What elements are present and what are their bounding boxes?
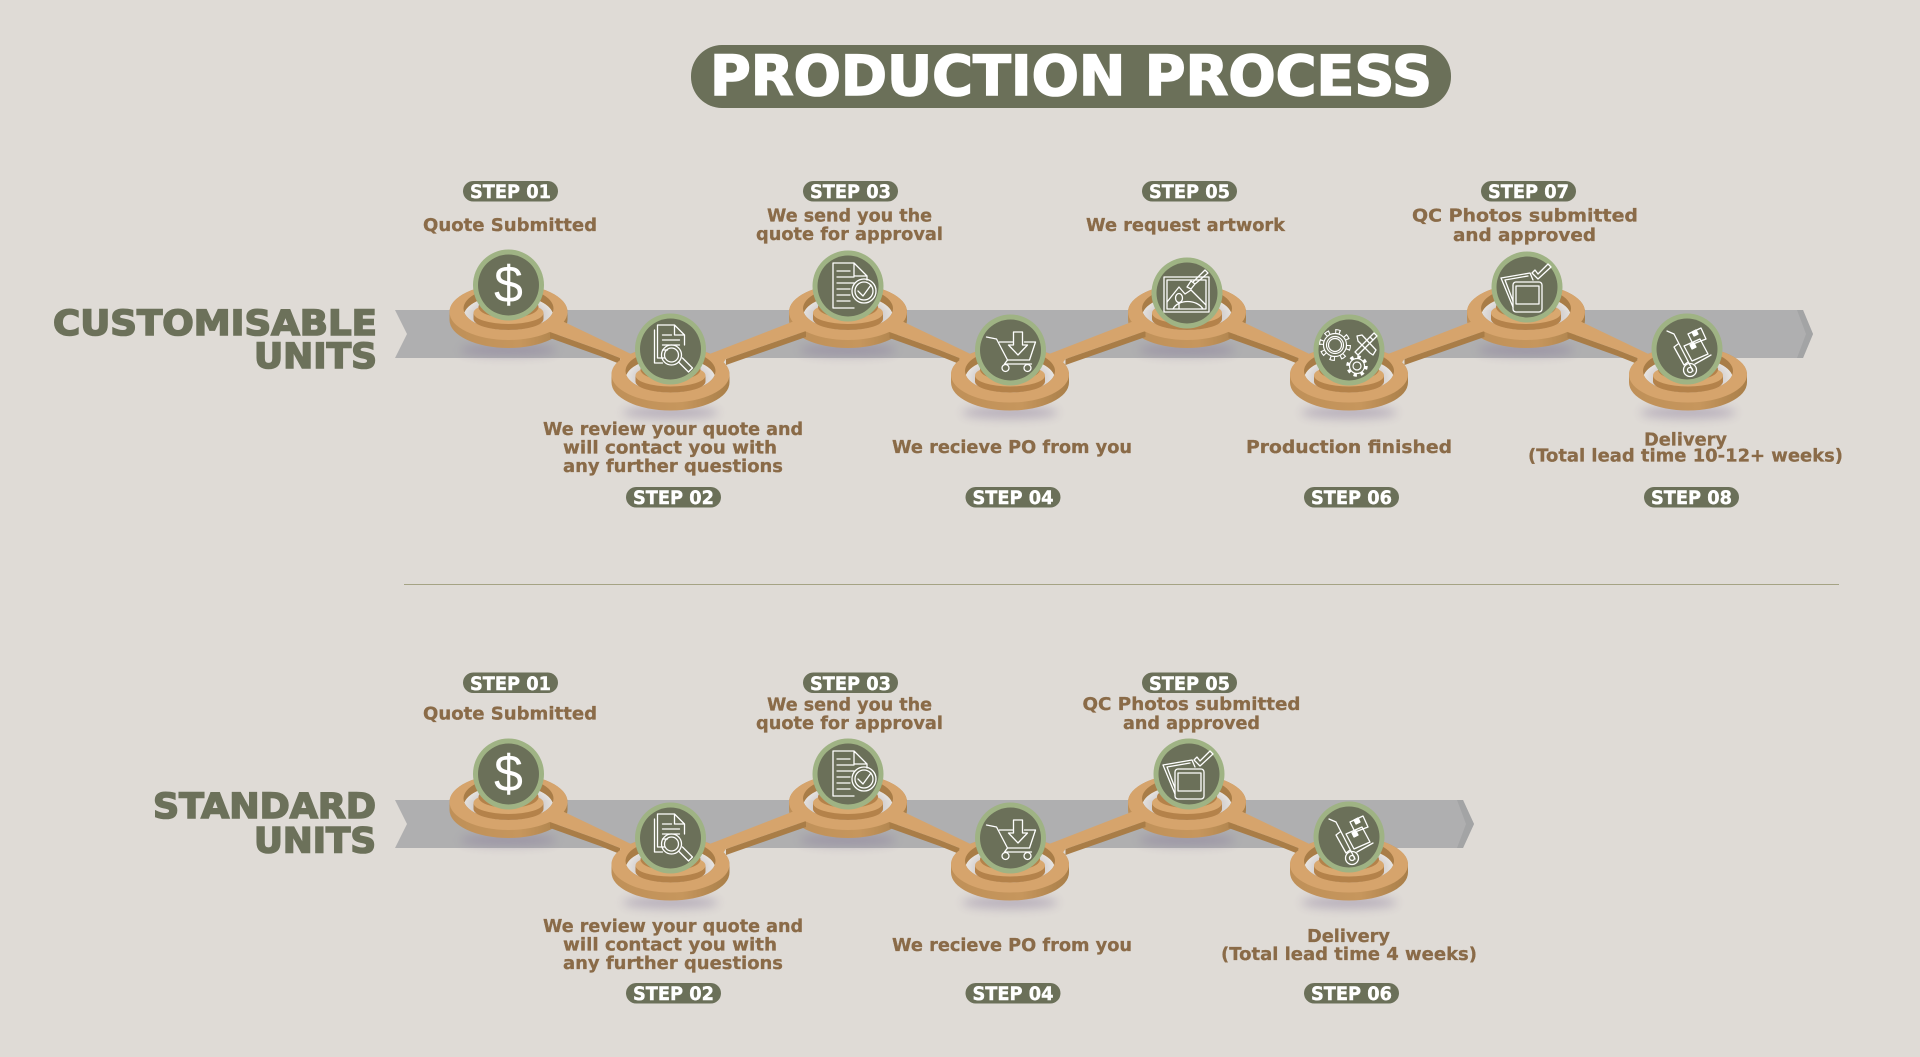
step 01 text: Quote Submitted bbox=[423, 215, 597, 236]
step 06 text: STEP 06 bbox=[1311, 487, 1392, 509]
step 08 text: Delivery bbox=[1644, 430, 1727, 450]
step 04 text bbox=[892, 437, 1132, 509]
step 05 text bbox=[1086, 181, 1286, 236]
step 02 text: STEP 02 bbox=[633, 983, 714, 1005]
step 02 text: will contact you with bbox=[563, 934, 777, 956]
step 01 text bbox=[423, 672, 597, 724]
step 04 text: STEP 04 bbox=[972, 487, 1054, 509]
step 03 text: We send you the bbox=[767, 206, 932, 226]
icon: cart bbox=[975, 314, 1046, 386]
process track: customisable units bbox=[450, 284, 1747, 418]
arrow band: standard units bbox=[395, 800, 1474, 848]
step 03 text: quote for approval bbox=[756, 224, 943, 245]
step 06 text: STEP 06 bbox=[1311, 983, 1392, 1005]
step 05 text: STEP 05 bbox=[1149, 673, 1230, 695]
step 03 text: quote for approval bbox=[756, 713, 943, 734]
icon: hand truck bbox=[1314, 802, 1384, 872]
icon: document check bbox=[812, 250, 884, 322]
icon: hand truck bbox=[1652, 314, 1722, 384]
heading: customisable units: CUSTOMISABLE bbox=[53, 304, 377, 344]
step 04 text bbox=[892, 935, 1132, 1005]
step 05 text: STEP 05 bbox=[1149, 181, 1230, 203]
step 08 text: STEP 08 bbox=[1651, 487, 1732, 509]
step 04 text: STEP 04 bbox=[972, 983, 1054, 1005]
step 01 text: STEP 01 bbox=[470, 181, 551, 203]
step 02 text: any further questions bbox=[563, 953, 783, 974]
arrow band: customisable units bbox=[395, 310, 1813, 358]
step 08 text bbox=[1528, 430, 1843, 509]
icon: photos bbox=[1154, 738, 1224, 810]
step 02 text: We review your quote and bbox=[543, 916, 803, 937]
heading: standard units: STANDARD bbox=[153, 787, 376, 827]
icon: cart bbox=[975, 802, 1046, 874]
step 05 text: and approved bbox=[1123, 713, 1260, 734]
step 06 text bbox=[1221, 926, 1477, 1005]
heading: customisable units: UNITS bbox=[254, 337, 377, 377]
process track: standard units bbox=[450, 774, 1408, 908]
step 02 text bbox=[543, 916, 803, 1005]
icon: artwork bbox=[1152, 258, 1222, 328]
step 07 text: STEP 07 bbox=[1488, 181, 1569, 203]
heading: customisable units bbox=[53, 304, 377, 377]
divider bbox=[404, 584, 1839, 586]
step 06 text: Production finished bbox=[1246, 437, 1452, 458]
step 03 text bbox=[756, 672, 943, 734]
icon: document check bbox=[812, 738, 884, 810]
step 03 text bbox=[756, 181, 943, 245]
step 06 text bbox=[1246, 437, 1452, 509]
icon: gears bbox=[1314, 314, 1384, 386]
step 08 text: (Total lead time 10-12+ weeks) bbox=[1528, 446, 1843, 466]
step 03 text: STEP 03 bbox=[810, 673, 891, 695]
icon: document search bbox=[635, 314, 706, 384]
step 01 text: Quote Submitted bbox=[423, 704, 597, 724]
icon: document search bbox=[635, 802, 706, 874]
step 04 text: We recieve PO from you bbox=[892, 935, 1132, 956]
icon: dollar bbox=[473, 738, 544, 810]
step 01 text bbox=[423, 181, 597, 236]
step 05 text bbox=[1082, 672, 1300, 734]
step 07 text: and approved bbox=[1453, 225, 1596, 246]
heading: standard units bbox=[153, 787, 376, 862]
step 02 text: We review your quote and bbox=[543, 419, 803, 440]
step 06 text: (Total lead time 4 weeks) bbox=[1221, 944, 1477, 965]
icon: photos bbox=[1492, 252, 1562, 322]
step 06 text: Delivery bbox=[1307, 926, 1390, 947]
step 07 text: QC Photos submitted bbox=[1412, 206, 1638, 226]
step 02 text: any further questions bbox=[563, 456, 783, 477]
step 02 text: will contact you with bbox=[563, 438, 777, 458]
step 05 text: QC Photos submitted bbox=[1082, 694, 1300, 715]
step 02 text bbox=[543, 419, 803, 509]
step 03 text: STEP 03 bbox=[810, 181, 891, 203]
step 03 text: We send you the bbox=[767, 694, 932, 716]
step 02 text: STEP 02 bbox=[633, 487, 714, 509]
heading: standard units: UNITS bbox=[254, 822, 376, 862]
step 01 text: STEP 01 bbox=[470, 673, 551, 695]
icon: dollar bbox=[473, 250, 544, 320]
step 05 text: We request artwork bbox=[1086, 215, 1286, 236]
step 07 text bbox=[1412, 181, 1638, 246]
step 04 text: We recieve PO from you bbox=[892, 437, 1132, 458]
title: PRODUCTION PROCESS bbox=[710, 44, 1432, 108]
